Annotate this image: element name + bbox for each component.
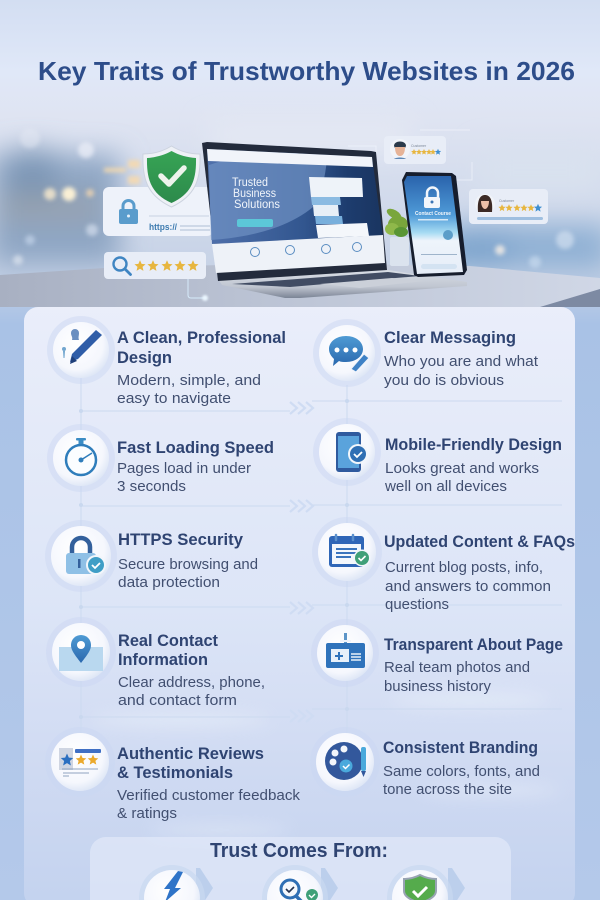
- heading: A Clean, Professional: [117, 329, 286, 347]
- chevrons row 3: [290, 602, 313, 614]
- laptop base: [218, 270, 467, 298]
- lid bezel: [202, 142, 387, 281]
- icon: lock: [45, 520, 117, 592]
- item: https security: data protection: [118, 574, 220, 591]
- keyboard: [232, 272, 420, 287]
- plant: [385, 207, 409, 266]
- item: fast loading speed: [47, 424, 274, 495]
- icon: magnifier check: [262, 865, 338, 900]
- screen feature icons: [250, 242, 362, 256]
- item: updated content and faqs: [312, 517, 575, 613]
- description: Pages load in under: [117, 460, 251, 477]
- stars: [498, 204, 542, 212]
- description: Current blog posts, info,: [385, 559, 543, 576]
- phone: [402, 172, 467, 277]
- item: updated content and faqs: and answers to common: [385, 578, 551, 595]
- item: transparent about page: [311, 619, 563, 695]
- padlock icon: [119, 201, 138, 224]
- search rating card: [104, 252, 206, 279]
- hero scene: [0, 125, 600, 307]
- heading: Real Contact: [118, 632, 218, 650]
- icon: id badge: [311, 619, 379, 687]
- item: authentic reviews: [45, 727, 300, 822]
- item: clean professional design: easy to navigate: [117, 390, 231, 407]
- icon: green shield: [387, 865, 465, 900]
- item: real contact information: Information: [118, 651, 208, 669]
- heading: Authentic Reviews: [117, 745, 264, 763]
- heading: Updated Content & FAQs: [384, 533, 575, 551]
- hero wave: [209, 153, 327, 240]
- screen button: [237, 219, 273, 227]
- reviewer label: Customer: [499, 199, 515, 203]
- heading: Fast Loading Speed: [117, 439, 274, 457]
- description: Same colors, fonts, and: [383, 763, 540, 780]
- description: Secure browsing and: [118, 556, 258, 573]
- screen hero: [207, 149, 383, 244]
- phone padlock: [424, 188, 440, 208]
- icon: stopwatch: [47, 424, 115, 492]
- blurred city background: [0, 125, 600, 270]
- phone heading: Contact Course: [415, 211, 451, 217]
- description: Who you are and what: [384, 353, 539, 370]
- item: clear messaging: you do is obvious: [384, 372, 504, 389]
- chevrons row 2: [290, 500, 313, 512]
- glowing tech lines: [348, 130, 472, 180]
- item: mobile friendly design: well on all devices: [384, 478, 507, 495]
- icon: map pin: [46, 617, 116, 687]
- progress bar: [477, 217, 543, 220]
- https card: [103, 187, 213, 236]
- heading: Trust Comes From:: [210, 840, 388, 862]
- item: transparent about page: business history: [384, 678, 491, 695]
- screen nav bar: [207, 149, 373, 167]
- item: mobile friendly design: [313, 418, 562, 495]
- item: fast loading speed: 3 seconds: [117, 478, 186, 495]
- screen text: Business: [233, 188, 276, 200]
- screen white section: [212, 235, 385, 273]
- screen text: Trusted: [232, 177, 268, 189]
- review card top: [384, 136, 446, 164]
- item: clean professional design: Design: [117, 349, 172, 367]
- avatar woman: [475, 194, 495, 214]
- table top: [0, 263, 600, 307]
- connector glow: [202, 295, 208, 301]
- item: real contact information: and contact form: [118, 692, 237, 709]
- main panel: [24, 307, 575, 900]
- item: real contact information: [46, 617, 265, 709]
- title: Key Traits of Trustworthy Websites in 2026: [38, 56, 575, 86]
- heading: Transparent About Page: [384, 636, 563, 654]
- five stars: [134, 260, 199, 271]
- item: consistent branding: tone across the site: [383, 781, 512, 798]
- texture clouds: [90, 692, 560, 836]
- description: Verified customer feedback: [117, 787, 300, 804]
- item: clean professional design: [47, 316, 286, 407]
- review card right: [469, 189, 548, 224]
- icon: speech bubble: [313, 319, 381, 387]
- url text: https://: [149, 222, 177, 233]
- item: updated content and faqs: questions: [385, 596, 449, 613]
- description: Looks great and works: [385, 460, 539, 477]
- icon: pen: [47, 316, 115, 384]
- icon: lightning: [139, 865, 213, 900]
- avatar man: [390, 139, 410, 159]
- trackpad: [320, 278, 425, 288]
- description: Clear address, phone,: [118, 674, 265, 691]
- heading: HTTPS Security: [118, 531, 244, 549]
- magnifier icon: [114, 258, 130, 274]
- chevrons row 1: [290, 402, 313, 414]
- item: consistent branding: [310, 727, 540, 798]
- item: authentic reviews: & ratings: [117, 805, 177, 822]
- screen mock panels: [309, 177, 369, 238]
- icon: smartphone: [313, 418, 381, 486]
- icon: palette: [310, 727, 380, 797]
- connector line: [188, 279, 205, 298]
- item: authentic reviews: & Testimonials: [117, 764, 233, 782]
- heading: Consistent Branding: [383, 739, 538, 757]
- table dark corner: [540, 289, 600, 307]
- description: Real team photos and: [384, 659, 530, 676]
- item: https security: [45, 520, 258, 592]
- chevrons row 4: [290, 710, 313, 722]
- trust comes from panel: [90, 837, 511, 900]
- stars: [411, 149, 441, 155]
- icon: calendar: [312, 517, 382, 587]
- icon: review stars: [45, 727, 115, 797]
- reviewer label: Customer: [411, 144, 427, 148]
- shield icon: [143, 146, 200, 207]
- heading: Clear Messaging: [384, 329, 516, 347]
- heading: Mobile-Friendly Design: [385, 436, 562, 454]
- screen text: [232, 177, 280, 211]
- description: Modern, simple, and: [117, 372, 261, 389]
- item: clear messaging: [313, 319, 539, 389]
- screen text: Solutions: [234, 199, 280, 211]
- laptop: [202, 142, 467, 298]
